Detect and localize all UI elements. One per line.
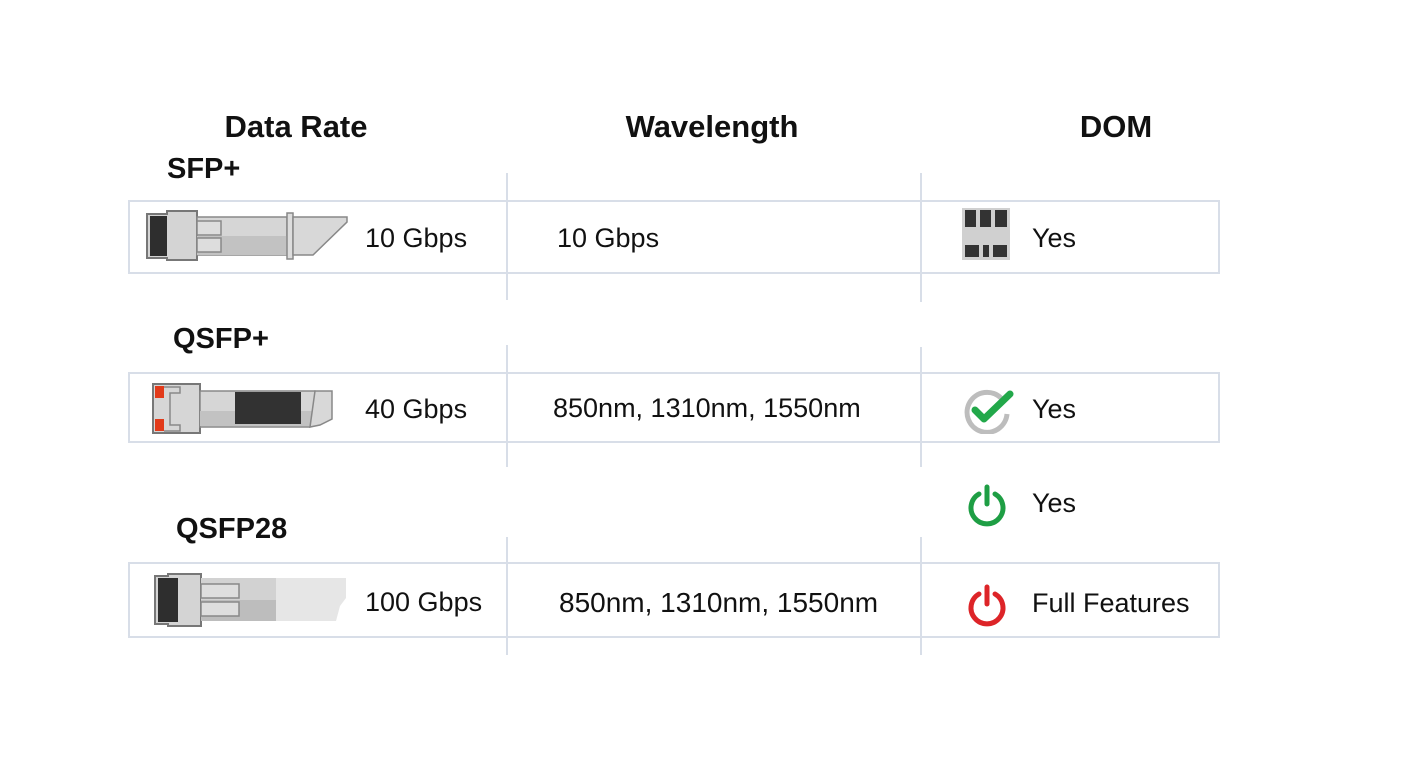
text: QSFP28 wavelength: 850nm, 1310nm, 1550nm — [559, 587, 878, 618]
text: SFP+ wavelength: 10 Gbps — [557, 223, 659, 253]
text: QSFP28 DOM: Full Features — [1032, 588, 1190, 618]
icon: green power — [968, 484, 1006, 526]
label: QSFP28: QSFP28 — [176, 513, 287, 545]
row: QSFP28 — [128, 562, 1220, 638]
text: SFP+ data rate: 10 Gbps — [365, 223, 467, 253]
header: DOM: DOM — [1080, 109, 1152, 144]
text: DOM Yes: Yes — [1032, 488, 1076, 518]
icon: QSFP+ module — [152, 383, 333, 434]
icon: SFP+ module — [146, 210, 348, 261]
row: SFP+ — [128, 200, 1220, 274]
text: QSFP28 data rate: 100 Gbps — [365, 587, 482, 617]
icon: check — [964, 390, 1014, 434]
text: SFP+ DOM: Yes — [1032, 223, 1076, 253]
icon: chip — [962, 208, 1010, 260]
text: QSFP+ DOM: Yes — [1032, 394, 1076, 424]
icon: red power — [968, 584, 1006, 626]
row: QSFP+ — [128, 372, 1220, 443]
text: QSFP+ wavelength: 850nm, 1310nm, 1550nm — [553, 393, 861, 423]
header: Data Rate: Data Rate — [224, 109, 368, 144]
label: SFP+: SFP+ — [167, 153, 240, 185]
text: QSFP+ data rate: 40 Gbps — [365, 394, 467, 424]
header: Wavelength: Wavelength — [626, 109, 798, 144]
label: QSFP+: QSFP+ — [173, 323, 269, 355]
icon: QSFP28 module — [154, 573, 346, 627]
dividers — [506, 173, 508, 300]
